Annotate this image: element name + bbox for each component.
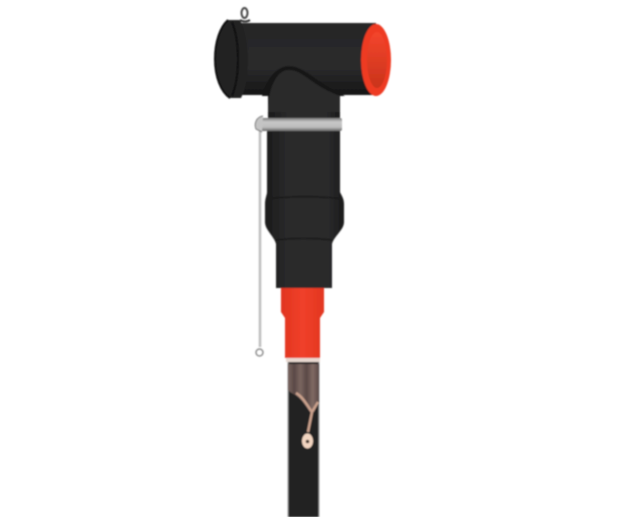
horizontal housing — [240, 23, 376, 95]
connector neck — [268, 90, 340, 130]
ground wire with ring — [256, 128, 263, 356]
metal clamp band — [255, 116, 342, 132]
end cap flange — [215, 20, 248, 98]
sleeve shading lines — [268, 197, 341, 240]
copper tail and lug — [296, 393, 318, 448]
top pull eye — [240, 8, 250, 22]
cable screen wires — [288, 364, 319, 412]
red heat shrink sleeve — [281, 286, 324, 362]
lower connector body — [265, 128, 344, 288]
red bore opening — [361, 24, 391, 96]
hump shadow — [262, 66, 345, 96]
cable — [288, 362, 319, 517]
hump — [268, 70, 340, 112]
